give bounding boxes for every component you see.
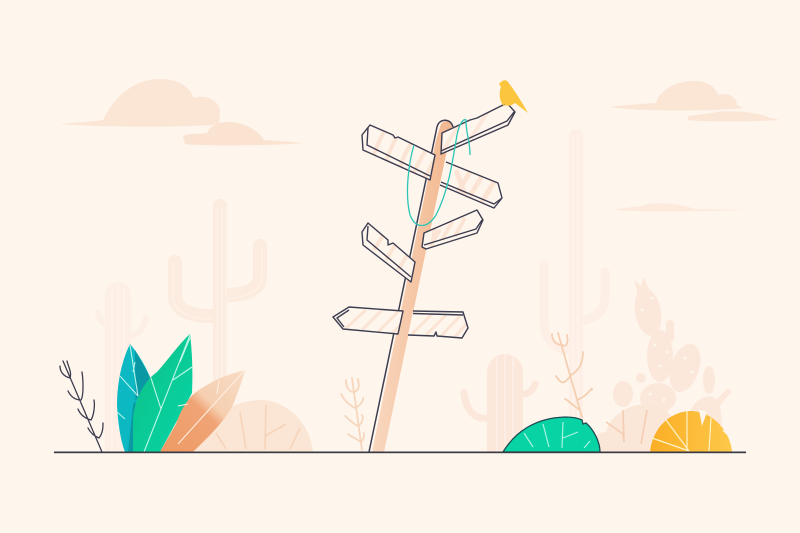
cloud: upper right [609, 81, 743, 110]
sign: middle right [422, 210, 483, 249]
twig: right pale [552, 333, 592, 417]
post outline [369, 120, 453, 452]
post fill [372, 121, 452, 452]
bush: green dome [503, 417, 600, 452]
illustration: signpost in the desert [54, 79, 779, 454]
cloud: far right [688, 111, 780, 122]
cactus: small left [107, 320, 126, 336]
sign: upper left piece [362, 125, 435, 180]
sign: middle left [362, 223, 415, 282]
leaf: green [133, 334, 192, 452]
ground line [54, 452, 746, 453]
cactus: tall right [544, 134, 605, 440]
bush: yellow dome [650, 410, 732, 452]
cactus: lower right [460, 354, 538, 452]
sign: lower left [333, 307, 403, 334]
bird: yellow [499, 80, 528, 113]
twig: dark left [60, 361, 103, 452]
cloud: middle right [616, 203, 745, 212]
cactus: tall left [168, 199, 267, 382]
bush: pale right dome [588, 404, 682, 452]
bush: pale left dome [193, 400, 313, 452]
sign: lower right [408, 311, 468, 338]
signpost [333, 103, 515, 452]
twig: centre pale [341, 378, 364, 450]
cactus: prickly pear [613, 277, 731, 425]
sign: upper right [441, 103, 515, 154]
wire: teal [407, 120, 470, 226]
cloud: small left [183, 122, 305, 145]
sign: upper right piece [440, 162, 502, 208]
leaf: peach [160, 370, 245, 452]
cloud: large left [60, 79, 220, 127]
leaf: blue [117, 344, 150, 452]
